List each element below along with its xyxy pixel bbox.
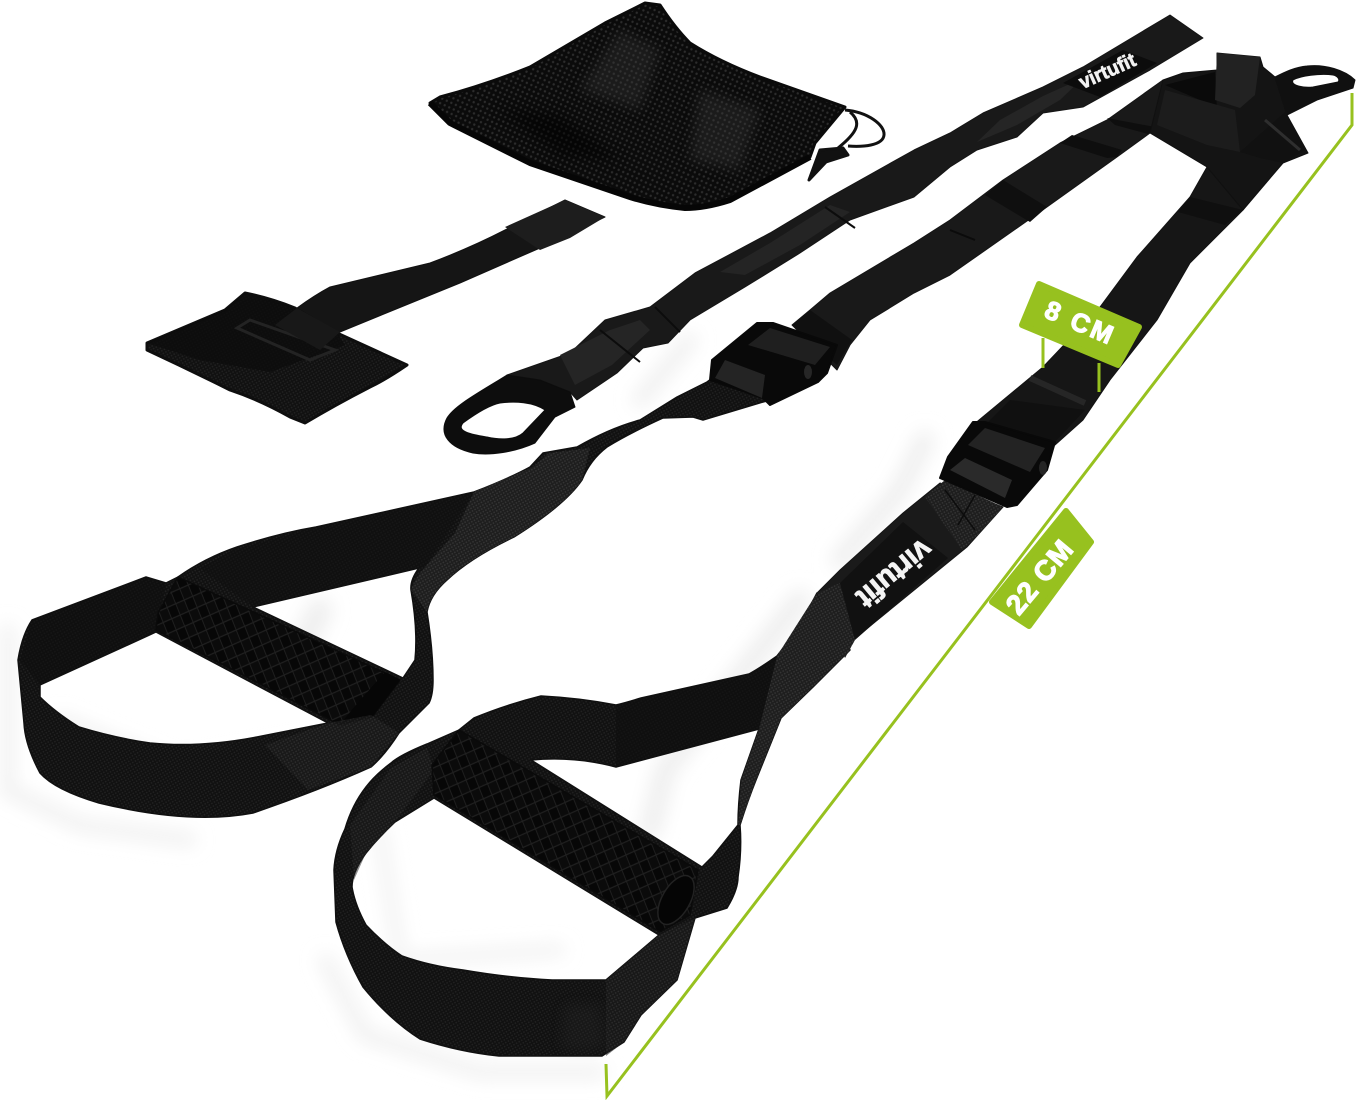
width tag: 8 CM: 8 CM: [1041, 294, 1120, 351]
loop shaded band: [20, 577, 166, 685]
upper middle buckle: [710, 323, 837, 405]
mesh carry bag: [430, 3, 884, 208]
extension strap with carabiner: [444, 15, 1203, 454]
strap label: virtufit: [1076, 49, 1140, 94]
width tag: 8 CM: [1022, 284, 1139, 365]
twisted strap section: [738, 593, 850, 825]
anchor ring: [1275, 66, 1355, 115]
strap label: [1063, 49, 1157, 97]
soft floor shadows: [8, 340, 925, 1072]
door anchor pad with strap: [147, 200, 605, 423]
twisted strap section: [411, 448, 590, 612]
length tag: 22 CM: 22 CM: [1000, 533, 1080, 620]
main strap lower section with label: [817, 480, 1003, 658]
woven highlight: [562, 1005, 606, 1050]
main strap upper section: [973, 167, 1260, 445]
grip bar: [432, 730, 698, 932]
middle strap upper section: [792, 80, 1175, 370]
carabiner ring: [444, 375, 575, 454]
grip end cap: [650, 870, 702, 930]
anchor hub: [1150, 53, 1308, 210]
length tag: 22 CM: [992, 511, 1091, 626]
strap label: [840, 522, 948, 640]
right strap and anchor hub: [792, 53, 1355, 445]
width ticks: [1043, 338, 1099, 392]
lower main buckle: [940, 422, 1055, 507]
total length dimension line: [606, 93, 1352, 1096]
right handle loop: [334, 593, 850, 1056]
strap label: virtufit: [850, 532, 938, 614]
grip bar: [156, 577, 400, 725]
left handle loop: [18, 365, 790, 817]
bag drawstring and toggle: [809, 110, 884, 180]
